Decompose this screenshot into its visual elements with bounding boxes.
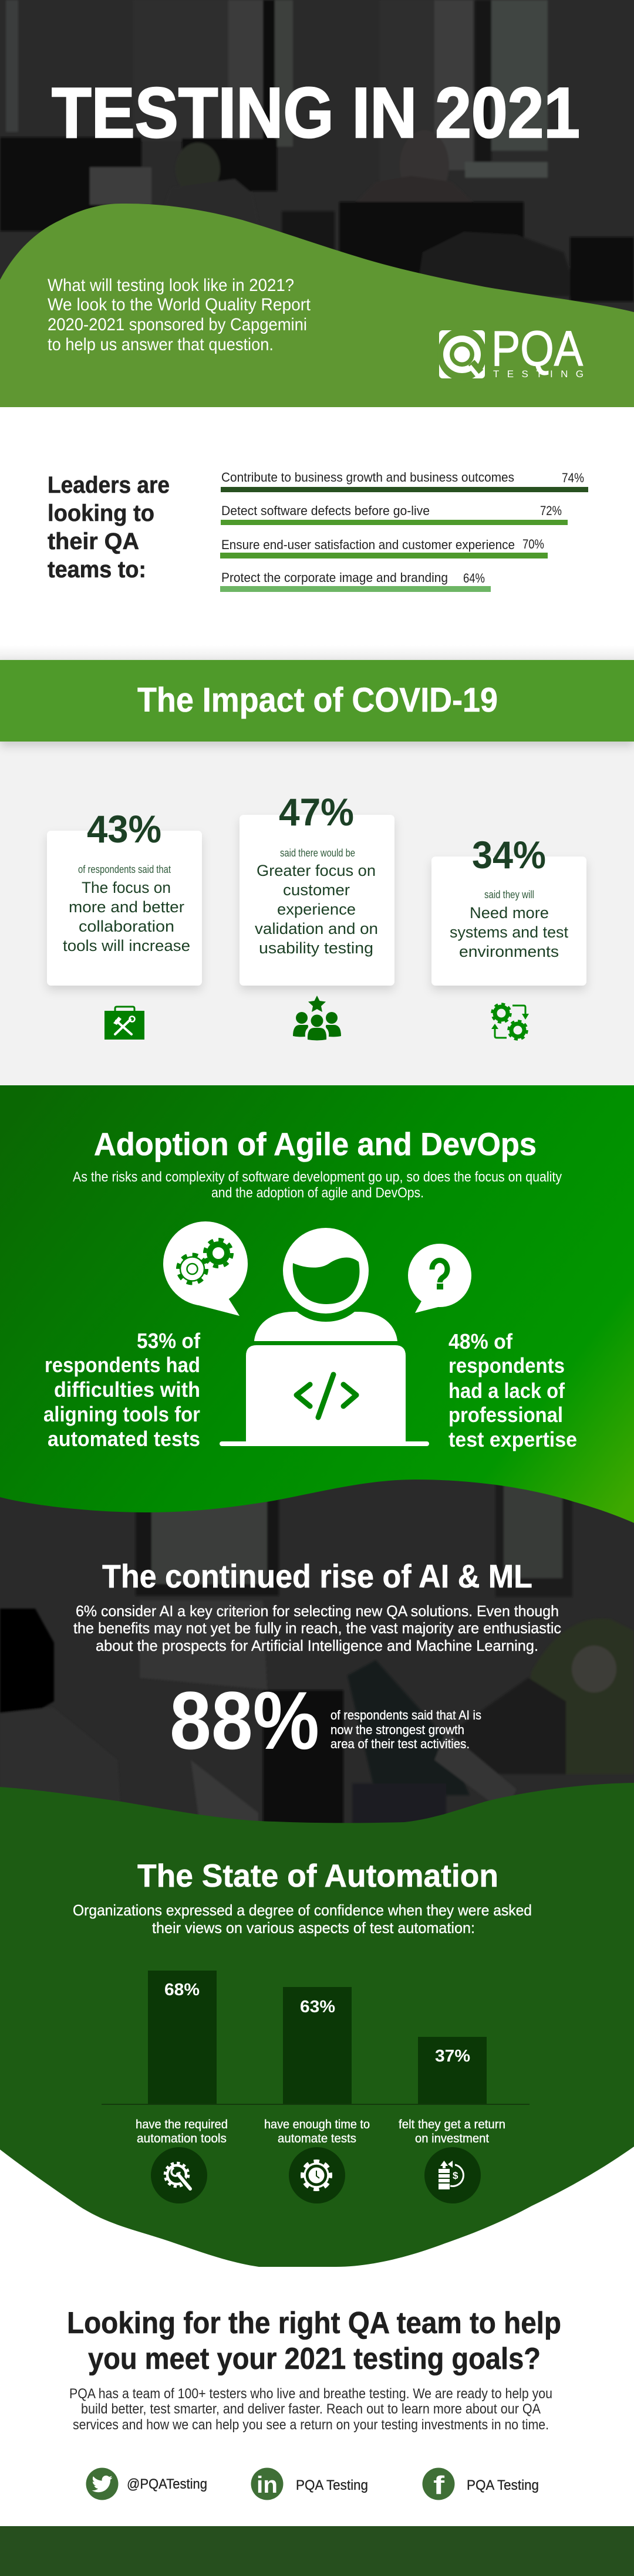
automation paragraph [73,1901,532,1937]
callout: 48%: 48% of [448,1329,513,1353]
bar: corporate image 64%: Protect the corporate image and branding [221,570,448,585]
social: facebook: PQA Testing [467,2477,539,2493]
card: 34%: said they will [484,889,534,901]
heading: AI and ML: The continued rise of AI & ML [102,1558,532,1595]
social: facebook [423,2467,539,2500]
bar: business growth 74% [221,470,588,492]
callout: 53%: 53% of [137,1329,201,1353]
bar labels: felt they get a return [399,2118,505,2131]
hero office photo [0,0,634,407]
panel: impact of COVID-19 [0,645,634,1085]
bar: user satisfaction 70%: Ensure end-user satisfaction and customer experience [221,537,515,552]
heading: call to action [67,2306,561,2376]
logo: PQA Testing: TESTING [493,368,584,380]
green wave [0,204,634,407]
card: 43%: 43% [87,807,161,851]
icon: return on investment [424,2147,481,2203]
panel: Agile and DevOps [0,1085,634,1523]
card: 34%: 34% [472,833,546,876]
automation paragraph: Organizations expressed a degree of confidence when they were asked [73,1901,532,1919]
icon: gear and wrench [151,2147,207,2203]
callout: 53%: difficulties with [54,1377,200,1402]
callout: 53% [43,1329,201,1451]
automation background shape [0,1783,634,2267]
heading: leaders [48,472,170,583]
bar labels: have enough time to [264,2118,370,2131]
bar labels: have the required [136,2118,228,2131]
panel: hero [0,0,634,407]
card: 34%: Need more [470,904,549,922]
icon: gear and clock [289,2147,345,2203]
logo: PQA Testing: PQA [491,321,583,376]
card: 47%: customer [283,881,350,899]
heading: call to action: Looking for the right QA team to help [67,2306,561,2340]
callout: 53%: aligning tools for [43,1402,200,1426]
bar chart [102,1971,530,2105]
card: 34%: environments [459,943,559,960]
heading: leaders: teams to: [48,557,146,583]
card: 43%: of respondents said that [78,864,171,875]
heading: leaders: looking to [48,500,154,526]
callout: 53%: respondents had [45,1353,200,1377]
bar: user satisfaction 70% [220,537,548,558]
icon: toolbox [104,1007,144,1040]
intro text: to help us answer that question. [48,335,274,354]
bar: business growth 74%: Contribute to business growth and business outcomes [221,470,514,485]
bar chart: 37% [435,2047,470,2066]
stat description [331,1708,481,1751]
card: 34% [431,833,586,986]
card: 43%: The focus on [82,879,171,896]
callout: 48%: had a lack of [448,1379,565,1403]
icon: gears with arrows [491,1004,529,1040]
heading: agile: Adoption of Agile and DevOps [94,1126,537,1162]
agile paragraph: and the adoption of agile and DevOps. [211,1185,424,1201]
agile paragraph [73,1169,562,1201]
bar: business growth 74%: 74% [562,470,584,485]
callout: 53%: automated tests [48,1427,200,1451]
heading: leaders: Leaders are [48,472,170,498]
social: twitter [86,2467,207,2500]
card: 43%: more and better [69,898,184,916]
bar labels [136,2118,505,2145]
call to action paragraph: services and how we can help you see a return on your testing investments in no time. [73,2417,549,2433]
heading: automation: The State of Automation [137,1857,498,1894]
title: TESTING IN 2021 [52,73,580,153]
bar chart: 68% [164,1981,200,1999]
intro text [48,276,311,354]
callout: 48%: test expertise [448,1427,577,1451]
stat description: of respondents said that AI is [331,1708,481,1722]
intro text: What will testing look like in 2021? [48,276,294,295]
card: 47%: Greater focus on [257,862,376,879]
bar: software defects 72%: 72% [540,503,562,518]
card: 47% [240,790,394,986]
bar: corporate image 64% [220,570,491,592]
card: 34%: systems and test [450,923,568,941]
footer band [0,2526,634,2576]
intro text: We look to the World Quality Report [48,295,311,314]
panel: call to action [67,2306,561,2500]
banner heading [0,660,634,742]
automation paragraph: their views on various aspects of test automation: [152,1919,475,1937]
icon: developer at laptop [220,1228,429,1446]
icon: return on investment: $ [453,2170,458,2181]
social: twitter: @PQATesting [127,2476,207,2492]
social: linkedin [251,2467,368,2500]
call to action paragraph [69,2386,552,2433]
AI paragraph: 6% consider AI a key criterion for selecting new QA solutions. Even though [76,1602,559,1620]
agile paragraph: As the risks and complexity of software development go up, so does the focus on quality [73,1169,562,1185]
social: facebook: f [433,2471,444,2500]
AI paragraph: the benefits may not yet be fully in reach, the vast majority are enthusiastic [73,1619,561,1637]
card: 47%: 47% [279,790,354,834]
AI paragraph [73,1602,561,1654]
agile background wave [0,1085,634,1523]
bar labels: on investment [415,2132,489,2145]
call to action paragraph: PQA has a team of 100+ testers who live and breathe testing. We are ready to help you [69,2386,552,2402]
icon: team with star [293,996,341,1041]
logo: PQA Testing [437,321,584,381]
bar labels: automate tests [278,2132,356,2145]
card: 43%: tools will increase [63,937,190,954]
panel: leaders expectations [48,470,588,592]
bar labels: automation tools [137,2132,227,2145]
panel: state of automation [0,1783,634,2267]
stat description: area of their test activities. [331,1736,470,1751]
heading: call to action: you meet your 2021 testing goals? [88,2342,541,2376]
stat: 88%: 88% [170,1674,319,1766]
heading: leaders: their QA [48,529,139,554]
intro text: 2020-2021 sponsored by Capgemini [48,315,307,334]
banner heading: The Impact of COVID-19 [137,681,498,719]
card: 47%: said there would be [280,847,355,859]
icon: speech bubble with question mark [408,1244,471,1313]
icon: speech bubble with gears [163,1221,248,1316]
card: 47%: experience [277,901,356,918]
card: 43% [47,807,202,986]
callout: 48% [448,1329,577,1451]
bar: software defects 72%: Detect software defects before go-live [221,503,430,518]
bar: software defects 72% [221,503,568,525]
call to action paragraph: build better, test smarter, and deliver faster. Reach out to learn more about our QA [81,2401,541,2417]
AI office photo [0,1467,634,1830]
AI paragraph: about the prospects for Artificial Intelligence and Machine Learning. [96,1637,538,1654]
callout: 48%: respondents [448,1353,565,1377]
social: linkedin: in [257,2472,278,2498]
panel: AI and ML [0,1467,634,1830]
card: 47%: usability testing [259,939,373,957]
bar chart: 63% [300,1998,335,2016]
bar: corporate image 64%: 64% [463,571,485,585]
social: linkedin: PQA Testing [296,2477,368,2493]
callout: 48%: professional [448,1403,563,1427]
bar: user satisfaction 70%: 70% [522,537,544,551]
card: 47%: validation and on [255,920,378,937]
stat description: now the strongest growth [331,1722,464,1737]
card: 43%: collaboration [79,918,174,935]
